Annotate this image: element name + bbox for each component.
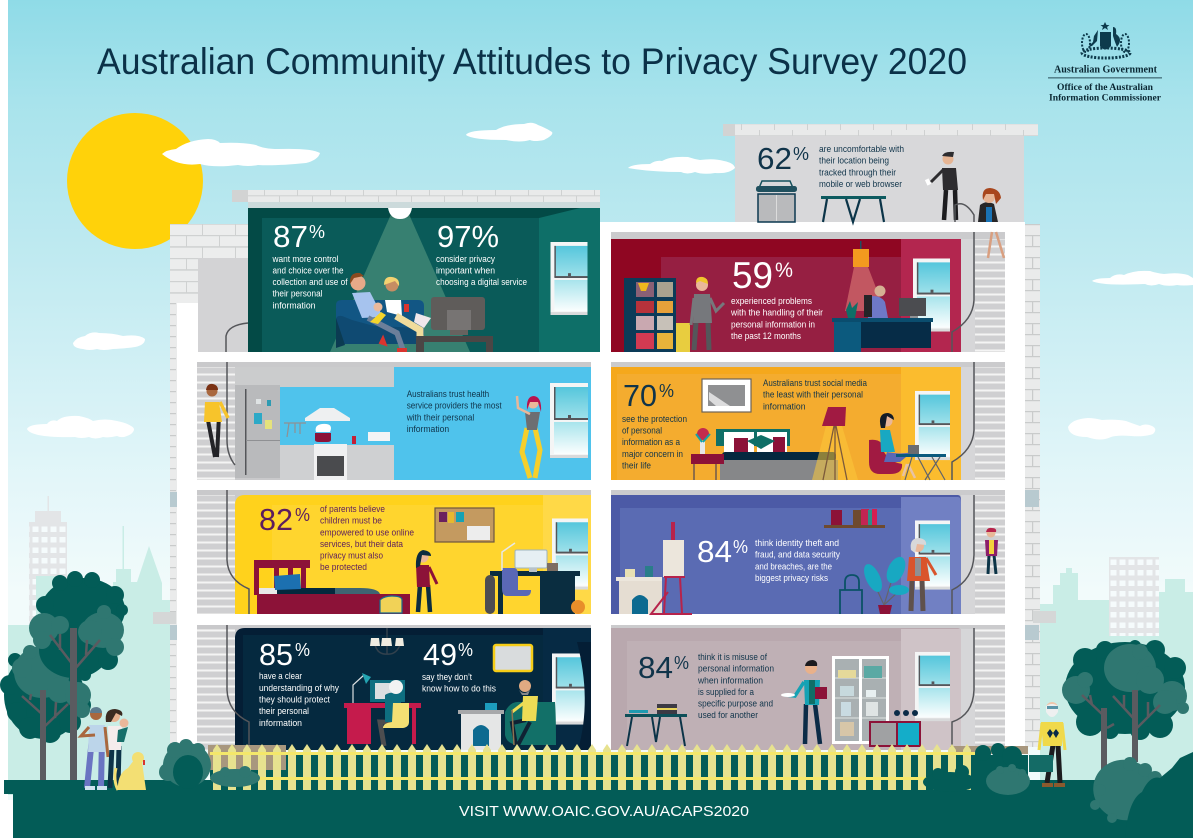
television (431, 297, 485, 335)
text: 85%: their personal (259, 706, 309, 717)
text: 59%: 59 (732, 255, 773, 296)
front step left (208, 745, 286, 770)
hanging lamp (845, 241, 885, 311)
bottle (352, 436, 356, 444)
bushes far right (1085, 751, 1193, 838)
text: 84% identity: and breaches, are the (755, 561, 832, 572)
counter units (280, 445, 394, 480)
fence rails (210, 752, 975, 780)
panel: kitchen health trust (197, 362, 591, 480)
left brick edge (170, 303, 177, 748)
ceiling light (388, 208, 412, 219)
stair rail (227, 490, 249, 614)
woman holding baby (106, 709, 122, 788)
panel: 59% red office (611, 232, 1005, 352)
fireplace (616, 566, 662, 614)
girl with phone (416, 550, 437, 612)
text: social media trust: Australians trust social media (763, 378, 868, 389)
text: health trust: with their personal (406, 412, 474, 423)
man with plate (781, 660, 827, 744)
sun (67, 113, 203, 249)
golden dog (115, 752, 146, 790)
text: 84% misuse: 84 (638, 650, 673, 685)
text: 97%: 97% (437, 219, 499, 254)
stair rail (955, 204, 974, 222)
window (552, 653, 588, 725)
man in grey suit (691, 277, 724, 350)
table with books (625, 704, 687, 746)
yellow chair (383, 703, 409, 728)
window (550, 383, 588, 458)
text: 59%: with the handling of their (730, 308, 824, 319)
text: 87%: collection and use of (272, 277, 348, 288)
text: 97%: important when (436, 266, 495, 276)
panel: 62% rooftop (723, 124, 1038, 222)
city skyline right (1040, 557, 1193, 800)
curtain (577, 642, 591, 750)
text: 49%: say they don’t (422, 672, 472, 683)
text: health trust (406, 389, 502, 435)
TV stand (416, 336, 493, 352)
text: 82%: 82 (259, 502, 293, 537)
window (915, 391, 950, 460)
panel: 87% and 97% teal living room (248, 208, 600, 352)
text: 70%: their life (622, 460, 651, 472)
desk lamp (502, 543, 515, 570)
text: 59% (730, 255, 824, 342)
woman on laptop (869, 413, 915, 478)
text: 87% (272, 219, 348, 311)
text: 70%: of personal (622, 426, 662, 437)
couple with baby and dog (81, 707, 146, 790)
boy on stairs (985, 528, 998, 574)
left brick shoulder (170, 258, 198, 303)
bedside table with vase (691, 428, 724, 480)
city skyline left (8, 496, 178, 795)
text: 82%: privacy must also (320, 550, 383, 562)
text: 97%: choosing a digital service (436, 277, 527, 288)
text: 84% misuse: % (674, 653, 689, 673)
bed (254, 560, 410, 614)
bed (716, 429, 838, 480)
man in cap (81, 707, 108, 790)
office name: Information Commissioner (1049, 94, 1162, 104)
stair rail (952, 362, 974, 480)
woman in black jacket (978, 188, 1001, 222)
front garden (208, 744, 1028, 790)
woman walking down stairs (988, 232, 1004, 258)
light cone (330, 212, 470, 352)
text: 62%: tracked through their (819, 167, 897, 178)
window (915, 652, 950, 721)
text: 84% misuse: used for another (698, 710, 759, 721)
basketball (571, 600, 585, 614)
bookcase (624, 278, 676, 352)
text: 84% misuse: specific purpose and (698, 698, 773, 710)
cooking pot (315, 424, 331, 442)
footer link: VISIT WWW.OAIC.GOV.AU/ACAPS2020 (459, 803, 749, 820)
outdoor table (821, 196, 886, 222)
text: social media trust: the least with their personal (763, 390, 863, 401)
text: 85%: understanding of why (259, 683, 339, 694)
baby (370, 302, 386, 324)
icon: coat of arms (1082, 22, 1130, 58)
right balcony slab (1033, 611, 1056, 623)
text: 84% misuse: is supplied for a (698, 687, 755, 698)
tree tall left (29, 571, 128, 788)
tree pair right (1062, 640, 1189, 780)
text: 49% (422, 637, 496, 695)
wall shelf with books (824, 509, 885, 528)
text: 84% identity: 84 (697, 534, 732, 569)
range hood (305, 408, 350, 421)
dark lawn behind fence (210, 752, 980, 782)
barbecue (756, 181, 797, 222)
text: 70%: information as a (622, 437, 681, 448)
text: 84% misuse: personal information (698, 664, 774, 675)
man with phone (925, 152, 958, 220)
panel: 84% purple studio (611, 490, 1005, 614)
text: 62% (757, 141, 904, 190)
text: 84% misuse: when information (697, 675, 763, 686)
floor band patches (170, 490, 1039, 640)
woman at desk (864, 286, 888, 318)
text: 82%: services, but their data (320, 539, 404, 550)
text: 82%: empowered to use online (320, 527, 414, 538)
utensil rail (284, 423, 306, 437)
white wall structure (177, 222, 1025, 750)
text: 82%: of parents believe (320, 504, 385, 515)
office desk (832, 318, 933, 352)
monitor (899, 298, 926, 325)
bushes left of fence (159, 739, 260, 789)
stair rail (952, 232, 974, 352)
text: 62%: % (793, 144, 809, 164)
text: health trust: Australians trust health (407, 389, 489, 400)
skateboard (485, 575, 495, 614)
left upper brick wall (170, 224, 248, 258)
text: 97%: consider privacy (436, 254, 495, 265)
window (913, 258, 950, 332)
easel with canvas (651, 522, 692, 614)
logo: Australian Government crest and office name (1048, 22, 1162, 104)
text: 70%: see the protection (622, 414, 687, 425)
window (552, 518, 588, 590)
man on stairs (204, 384, 228, 457)
text: 84% misuse: think it is misuse of (698, 652, 767, 663)
text: social media trust: information (763, 401, 806, 412)
old man with cane (512, 680, 538, 745)
roof left (232, 190, 600, 208)
text: 87%: 87 (273, 219, 308, 254)
text: 85% (259, 637, 339, 729)
text: 82%: be protected (320, 562, 367, 573)
bushes right of fence (923, 743, 1030, 795)
text: 49%: % (458, 640, 473, 660)
fence pickets (212, 744, 975, 790)
chandelier (370, 628, 404, 654)
panel: 84% mauve pantry (611, 625, 1005, 750)
text: 62%: mobile or web browser (819, 179, 903, 190)
text: 87%: want more control (272, 254, 338, 265)
low cabinet (869, 710, 921, 747)
text: 59%: % (775, 259, 793, 282)
woman on sofa (384, 277, 420, 348)
clouds (27, 123, 1193, 439)
left balcony slab (153, 612, 176, 624)
chair (502, 568, 531, 596)
front step right (950, 746, 1028, 754)
window (915, 520, 950, 590)
backpack (380, 596, 402, 613)
text: 49%: know how to do this (422, 684, 496, 695)
stair rail (227, 362, 235, 465)
magazine (414, 313, 431, 328)
stair rail (952, 628, 974, 748)
text: 84% identity: biggest privacy risks (755, 573, 828, 584)
mirror (494, 645, 532, 671)
glass pantry cabinet (832, 656, 889, 744)
text: 85%: 85 (259, 637, 293, 672)
sofa (336, 300, 424, 348)
text: 85%: information (259, 718, 302, 729)
floor lamp (812, 407, 858, 480)
bentwood chair (840, 575, 862, 614)
man on sofa (350, 273, 407, 352)
text: 84% identity (697, 534, 840, 584)
oven (314, 444, 347, 480)
text: 70%: major concern in (622, 449, 683, 460)
baby (117, 718, 128, 742)
text: 82%: children must be (320, 516, 382, 527)
text: social media trust (763, 378, 868, 412)
office name: Office of the Australian (1057, 83, 1154, 93)
ground (4, 780, 1193, 838)
text: 59%: the past 12 months (731, 331, 801, 342)
panel: 70% orange bedroom (611, 362, 1005, 480)
text: 62%: 62 (757, 141, 792, 176)
title: Australian Community Attitudes to Privacy Survey 2020 (97, 41, 967, 82)
dish rack (368, 432, 390, 441)
panel: 85% and 49% navy study (197, 625, 591, 750)
right brick column (1025, 224, 1040, 747)
armchair (505, 702, 556, 745)
fireplace (458, 703, 504, 750)
window (551, 242, 587, 315)
stair rail (227, 625, 249, 745)
text: 84% identity: % (733, 537, 748, 557)
text: 82% (259, 502, 414, 573)
text: 70%: % (659, 381, 674, 401)
old man with suitcase (1029, 702, 1065, 787)
text: 70% (622, 378, 687, 472)
woman with phone (517, 396, 541, 478)
text: 87%: and choice over the (272, 266, 344, 276)
potted plant (846, 301, 858, 318)
text: 87%: information (272, 300, 316, 311)
curved stair rail top left (226, 323, 248, 352)
cork board (435, 508, 494, 542)
text: 87%: % (309, 222, 325, 242)
tree small left (0, 645, 91, 782)
stair rail (952, 495, 974, 614)
text: 59%: personal information in (731, 319, 815, 330)
text: 85%: have a clear (259, 671, 303, 682)
text: health trust: service providers the most (407, 401, 502, 412)
older woman in orange cardigan (907, 538, 936, 611)
computer and lamp (353, 673, 405, 703)
text: 62%: their location being (819, 156, 889, 167)
grey upper landing (198, 258, 248, 352)
text: 70%: 70 (623, 378, 657, 413)
text: 62%: are uncomfortable with (819, 144, 904, 155)
fridge (235, 385, 280, 478)
text: 85%: % (295, 640, 310, 660)
text: health trust: information (407, 424, 449, 435)
pot plant (860, 554, 909, 614)
text: 85%: they should protect (259, 694, 330, 706)
older woman at desk (380, 680, 404, 746)
text: 84% identity: fraud, and data security (755, 550, 840, 561)
text: 84% misuse (638, 650, 774, 721)
student desk (490, 550, 580, 614)
text: 84% identity: think identity theft and (755, 538, 839, 549)
laptop table (896, 445, 946, 480)
text: 87%: their personal (272, 289, 322, 300)
text: 82%: % (295, 505, 310, 525)
red desk (344, 703, 421, 744)
framed picture (702, 379, 751, 412)
office name (1049, 83, 1162, 104)
text: 59%: experienced problems (731, 296, 812, 307)
text: 97% (436, 219, 527, 288)
upper cabinets (235, 367, 394, 387)
text: 49%: 49 (423, 637, 457, 672)
government name: Australian Government (1054, 64, 1157, 76)
building shell (153, 222, 1056, 750)
book stack (676, 323, 690, 352)
panel: 82% yellow child bedroom (197, 490, 591, 614)
